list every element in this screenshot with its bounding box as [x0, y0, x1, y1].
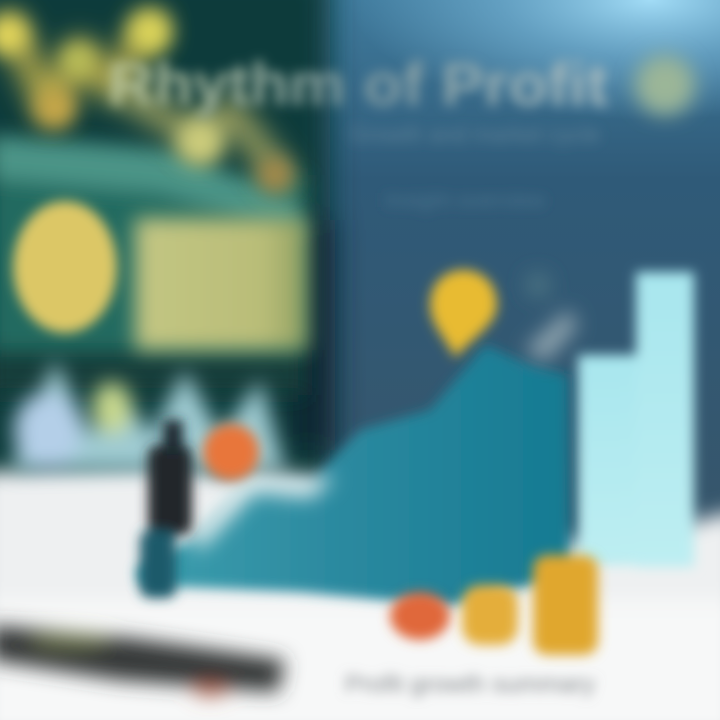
subtitle: Insight overview: [385, 190, 546, 212]
chart: cyan bars: [578, 272, 694, 567]
icon: tall coin stack: [533, 555, 598, 655]
icon: gold pin bulb: [430, 270, 497, 358]
chart: top left zigzag line: [10, 25, 280, 175]
subtitle: [350, 122, 600, 212]
panel: dark teal left background: [0, 0, 335, 490]
icon: yellow medallion: [13, 201, 117, 333]
icon: grey arrow marker: [525, 273, 578, 362]
panel: green banner: [0, 135, 305, 395]
panel: pale yellow card: [135, 218, 307, 350]
subtitle: Growth and market cycle: [350, 122, 600, 147]
panel: light floor: [0, 466, 720, 720]
icon: top right badge: [635, 55, 695, 115]
title: Rhythm of Profit: [108, 51, 608, 118]
icon: orange ball: [203, 424, 259, 480]
icon: medium coin stack: [462, 585, 518, 645]
caption text: Profit growth summary: [345, 671, 595, 698]
icon: orange coin stack: [390, 592, 450, 640]
figure: person silhouette: [140, 420, 192, 598]
chart: arrow highlight: [190, 470, 335, 550]
chart: pale mountains: [14, 360, 285, 470]
chart: zigzag data points: [0, 10, 292, 192]
chart: teal area bars: [135, 345, 570, 606]
icon: pen lying on floor: [0, 625, 285, 696]
